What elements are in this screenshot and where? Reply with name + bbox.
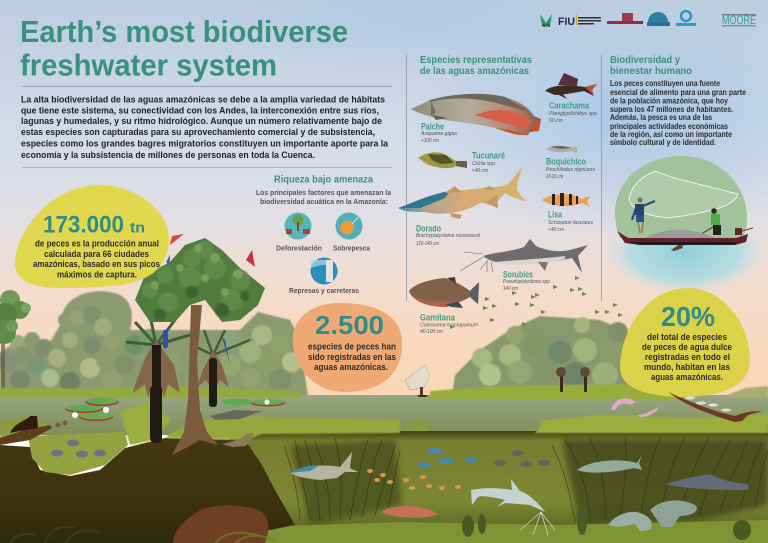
palm trees [126,315,250,443]
yellow blob [15,185,169,288]
title [20,14,348,82]
underwater paiche [381,506,439,518]
wellbeing text: esencial de alimento para una gran parte [610,88,746,97]
fish: sorubies [460,239,588,273]
threat labels [276,244,371,295]
wellbeing text: principales actividades económicas [610,122,728,131]
orange blob [293,303,402,392]
underwater background [230,431,768,531]
aquatic plants [309,495,751,540]
underwater sorubim [665,474,748,490]
green circle [615,156,747,238]
fish labels: Sorubíes [503,270,533,280]
far grass bank [0,384,768,400]
statistic: 20% [642,301,732,382]
background forest: centre [452,316,645,397]
intro text: La alta biodiversidad de las aguas amazónicas se debe a la amplia variedad de hábitats [21,94,385,106]
fish labels: 50 cm [549,118,563,124]
statistic: 173.000 tn: máximos de captura. [57,270,137,280]
fish: boquichico [546,146,577,153]
threats intro: Los principales factores que amenazan la [256,188,392,197]
fish: tucunare [418,152,467,168]
fish labels: 140 cm [503,286,518,292]
title: freshwater system [20,48,277,82]
fish labels: Paiche [421,122,444,132]
fish labels: Carachama [549,100,590,112]
fish labels: 120-140 cm [416,241,439,247]
title: Earth’s most biodiverse [20,14,348,49]
wellbeing text: Los peces constituyen una fuente [610,79,720,88]
statistic: 173.000 tn: de peces es la producción anual [35,238,159,248]
icon: deforestation [284,212,312,240]
otters [0,416,68,445]
heading: species [420,54,532,77]
near grass banks [0,402,768,445]
threat labels: Sobrepesca [333,244,371,252]
background: sky [0,0,768,400]
fish labels: Prochilodus nigricans [546,167,595,173]
wellbeing text [610,79,746,147]
fish labels: +100 cm [421,138,439,144]
fish labels: Colossoma macropomum [420,322,478,328]
statistic: 20%: 20% [661,301,715,332]
logos: MOORE [722,13,756,27]
statistic: 20%: aguas amazónicas. [651,372,723,382]
intro text: lagunas y humedales, y su ritmo hidrológico. Aunque un número relativamente bajo de [21,116,382,127]
yellow blob: 20% [620,288,750,397]
statistic: 173.000 tn: calculada para 66 ciudades [44,249,149,259]
icon: dams and roads [310,258,338,284]
fish labels: Cichla spp. [472,161,496,167]
logos: FIU [558,16,575,28]
fishers in boat [617,198,753,251]
lake under boat [607,210,763,294]
fish: dorado [398,166,527,219]
fish labels: 23-26 cm [545,174,563,180]
underwater dorado [290,452,358,480]
fish: carachama [545,73,597,99]
fish labels: Planiglypilichthys spp. [549,111,598,117]
intro text [21,94,389,161]
statistic: 173.000 tn [33,212,160,280]
fish labels: <40 cm [472,168,488,174]
left foreground tree [0,290,31,395]
fish: gamitana [409,277,479,308]
wellbeing text: símbolo cultural y de identidad. [610,138,716,147]
wellbeing text: Además, la pesca es una de las [610,113,712,122]
small distant fisher [405,365,430,397]
turtle [222,433,254,447]
fish labels [416,100,598,335]
heading: species: de las aguas amazónicas [420,65,529,77]
threat labels: Represas y carreteras [289,286,359,295]
logos: WCS [542,24,551,28]
underwater small fish schools [367,448,550,490]
fish labels: Pseudoplatystoma spp. [503,279,551,285]
fish: paiche [411,94,541,135]
fish labels: Boquichico [546,156,586,168]
distant palms [556,367,590,392]
ferns on soil [10,527,275,543]
fish labels: Arapaima gigas [420,131,457,137]
reeds [284,438,768,525]
background forest: left [0,291,308,397]
heading: wellbeing: Biodiversidad y [610,54,680,66]
macaws [166,234,255,267]
statistic: 2.500 [308,310,396,372]
cast net [629,171,738,218]
icon: overfishing [336,212,362,240]
underwater silver fish [577,455,642,473]
big tree [135,238,265,455]
heading: wellbeing [610,54,692,77]
logos [540,11,756,28]
migrating fish flock [450,276,623,329]
river floor [255,520,768,543]
statistic: 2.500: 2.500 [315,310,384,340]
statistic: 20%: del total de especies [647,332,727,342]
soil bank [0,438,295,543]
vertical dividers [406,55,602,301]
threats intro [256,188,392,206]
fallen branch with birds [668,392,762,422]
fish labels: Lisa [548,210,563,220]
river surface [0,395,768,435]
manatees [608,500,697,531]
intro text: estas especies son capturadas para su aprovechamiento comercial y de subsistencia, [21,127,375,138]
river dolphins [611,398,659,417]
statistic: 20%: de peces de agua dulce [642,342,732,352]
fish labels: Brachyplatystoma rousseauxii [416,233,481,239]
caiman [210,410,262,420]
rock [173,505,268,543]
statistic: 173.000 tn: amazónicas, basado en sus picos [33,259,160,269]
heading: wellbeing: bienestar humano [610,65,692,77]
fish labels: Dorado [416,224,441,234]
flooded pool with fish [28,432,128,475]
underwater catfish [471,479,555,535]
statistic: 20%: mundo, habitan en las [644,362,730,372]
fish labels: <40 cm [548,227,564,233]
statistic: 2.500: sido registradas en las [308,352,396,362]
statistic: 173.000 tn: 173.000 [43,212,124,238]
water lilies [65,398,285,421]
threat labels: Deforestación [276,244,322,252]
threats intro: biodiversidad acuática en la Amazonía: [260,197,388,206]
wellbeing text: de la población amazónica, que hoy [610,96,728,106]
fish labels: Gamitana [420,312,456,324]
statistic: 173.000 tn: tn [130,220,145,236]
intro text: especies como los grandes bagres migratorios constituyen un importante aporte para la [21,138,389,150]
statistic: 20%: registradas en todo el [645,352,730,362]
fish: lisa [542,193,590,207]
intro text: economía y la subsistencia de millones de personas en toda la Cuenca. [21,150,315,161]
heading: species: Especies representativas [420,54,532,66]
statistic: 2.500: aguas amazónicas. [314,362,388,372]
fish labels: 40-100 cm [420,329,443,335]
intro text: que tiene este sistema, su conectividad con los Andes, la interconexión entre sus ríos, [21,106,379,116]
fish labels: Schizodon fasciatus [548,220,593,226]
fish labels: Tucunaré [472,150,505,162]
statistic: 2.500: especies de peces han [308,342,396,352]
wellbeing text: de la región, así como un importante [610,130,732,139]
heading: threats: Riqueza bajo amenaza [274,174,373,186]
wellbeing text: supera los 47 millones de habitantes. [610,105,733,114]
